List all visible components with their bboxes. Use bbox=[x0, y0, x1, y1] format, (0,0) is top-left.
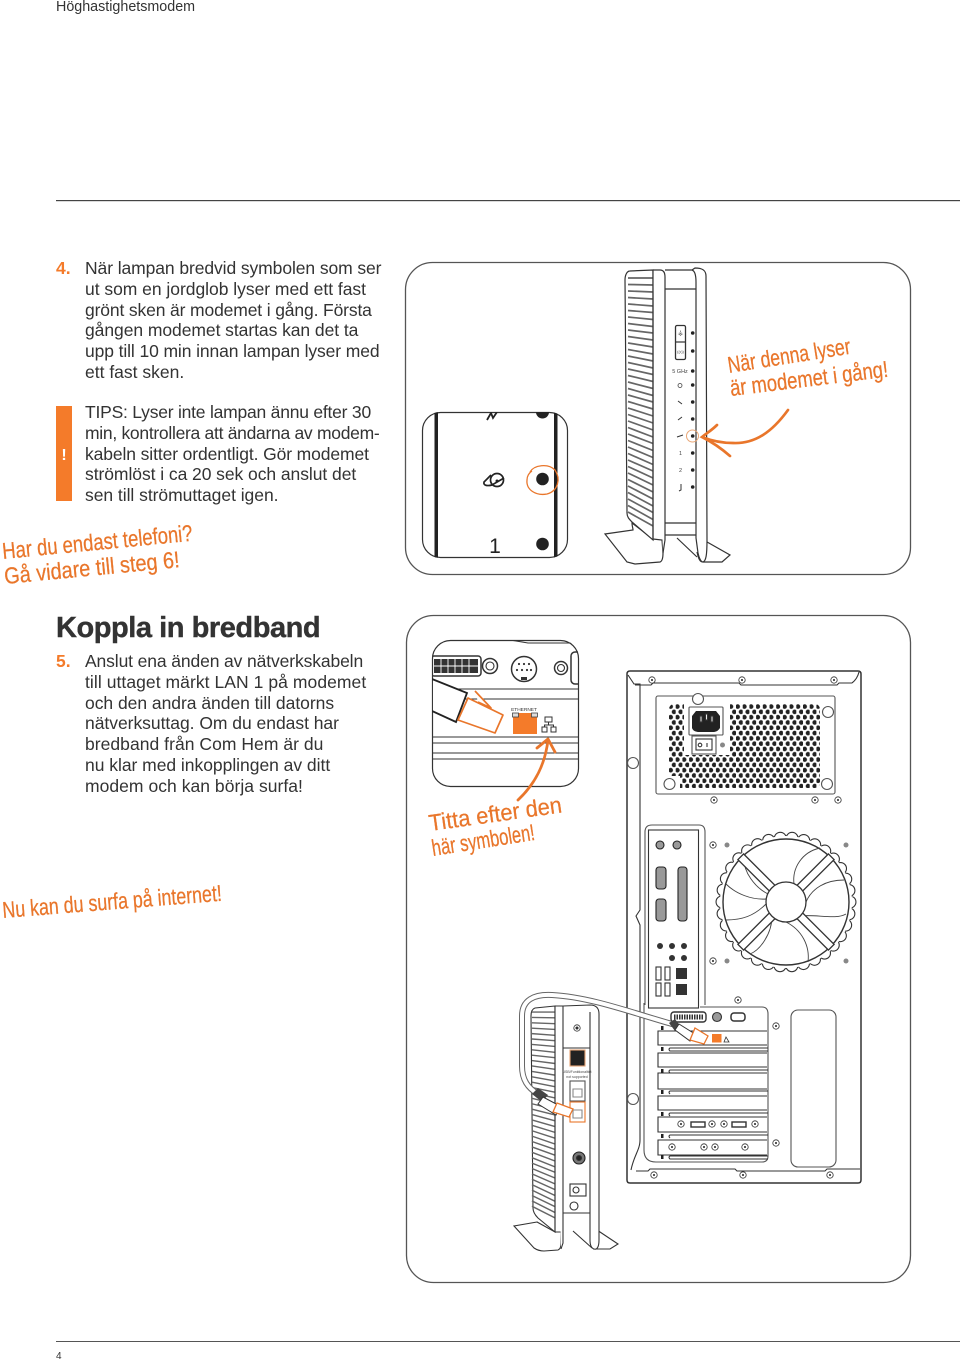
tips text: strömlöst i ca 20 sek och anslut det bbox=[85, 464, 356, 484]
handwritten note: when this lamp is lit: är modemet i gång! bbox=[728, 356, 889, 401]
step 5 text: bredband från Com Hem är du bbox=[85, 734, 323, 754]
case screws bbox=[649, 677, 848, 1178]
power supply bbox=[628, 694, 835, 1104]
modem illustration bbox=[605, 268, 730, 564]
tips text: kabeln sitter ordentligt. Gör modemet bbox=[85, 444, 369, 464]
panel frame bbox=[406, 262, 910, 574]
bottom rule bbox=[56, 1341, 960, 1342]
modem status lamps bbox=[691, 331, 694, 489]
step 5 number: 5. bbox=[56, 651, 71, 671]
ethernet port: ETHERNET bbox=[511, 707, 537, 713]
small modem rear view bbox=[514, 1005, 618, 1251]
step 5 text: till uttaget märkt LAN 1 på modemet bbox=[85, 672, 366, 692]
handwritten note: ready to surf: Nu kan du surfa på internet! bbox=[1, 880, 223, 923]
step 4 text bbox=[85, 258, 382, 382]
step 4 text: ett fast sken. bbox=[85, 362, 184, 382]
step 5 text: modem och kan börja surfa! bbox=[85, 776, 303, 796]
rear I/O panel bbox=[645, 825, 705, 1008]
step 4 text: gången modemet startas kan det ta bbox=[85, 320, 358, 340]
heading: Koppla in bredband bbox=[56, 612, 320, 644]
modem lamp labels: ((•)) bbox=[677, 349, 685, 354]
arrow to network symbol bbox=[518, 739, 555, 800]
step 4 text: grönt sken är modemet i gång. Första bbox=[85, 300, 372, 320]
network plug bbox=[458, 691, 503, 733]
tips text bbox=[85, 402, 379, 505]
inset: close-up of globe lamp: 1 bbox=[489, 535, 501, 558]
tips text: TIPS: Lyser inte lampan ännu efter 30 bbox=[85, 402, 371, 422]
handwritten note: look for symbol: här symbolen! bbox=[430, 819, 537, 861]
handwritten note: look for symbol: Titta efter den bbox=[427, 792, 563, 836]
panel: modem lamp bbox=[406, 262, 910, 574]
step 5 text: och den andra änden till datorns bbox=[85, 692, 334, 712]
modem lamp labels: 1 bbox=[679, 451, 682, 457]
step 5 text: nu klar med inkopplingen av ditt bbox=[85, 755, 330, 775]
step 4 text: ut som en jordglob lyser med ett fast bbox=[85, 279, 366, 299]
handwritten note: phone only bbox=[1, 520, 194, 589]
icon: network symbol bbox=[542, 717, 556, 732]
handwritten note: when this lamp is lit bbox=[726, 333, 889, 401]
tips text: min, kontrollera att ändarna av modem- bbox=[85, 423, 379, 443]
handwritten note: phone only: Har du endast telefoni? bbox=[1, 520, 194, 564]
network cable plugs bbox=[532, 1019, 708, 1117]
expansion slots bbox=[644, 1003, 836, 1167]
tips marker: ! bbox=[61, 447, 67, 464]
arrow to lamp bbox=[702, 410, 788, 456]
step 4 text: upp till 10 min innan lampan lyser med bbox=[85, 341, 379, 361]
small modem rear view: USB/Funktionalitet bbox=[562, 1070, 592, 1074]
top rule bbox=[56, 200, 960, 201]
small modem rear view: not supported bbox=[566, 1075, 588, 1079]
modem lamp labels: 2 bbox=[679, 468, 682, 474]
modem lamp labels: 5 GHz bbox=[672, 369, 688, 375]
highlight ring around lamp bbox=[686, 430, 698, 442]
step 5 text: Anslut ena änden av nätverkskabeln bbox=[85, 651, 363, 671]
modem lamp labels bbox=[672, 330, 688, 491]
handwritten note: when this lamp is lit: När denna lyser bbox=[726, 333, 853, 378]
step 5 text: nätverksuttag. Om du endast har bbox=[85, 713, 339, 733]
modem lamp labels: ⚶ bbox=[678, 330, 684, 337]
computer back panel bbox=[627, 671, 861, 1183]
handwritten note: look for symbol bbox=[427, 792, 563, 861]
step 5 text bbox=[85, 651, 366, 796]
tips marker bbox=[56, 406, 72, 501]
tips text: sen till strömuttaget igen. bbox=[85, 485, 278, 505]
inset: close-up of globe lamp bbox=[422, 406, 568, 558]
fan bbox=[720, 836, 852, 968]
step 4 text: När lampan bredvid symbolen som ser bbox=[85, 258, 381, 278]
ethernet port bbox=[511, 707, 538, 734]
step 4 number: 4. bbox=[56, 258, 71, 278]
handwritten note: phone only: Gå vidare till steg 6! bbox=[3, 546, 181, 589]
network cable bbox=[522, 995, 672, 1094]
inset: ethernet port close-up bbox=[427, 640, 861, 1251]
panel frame bbox=[406, 616, 910, 1282]
computer orange port bbox=[712, 1034, 729, 1042]
